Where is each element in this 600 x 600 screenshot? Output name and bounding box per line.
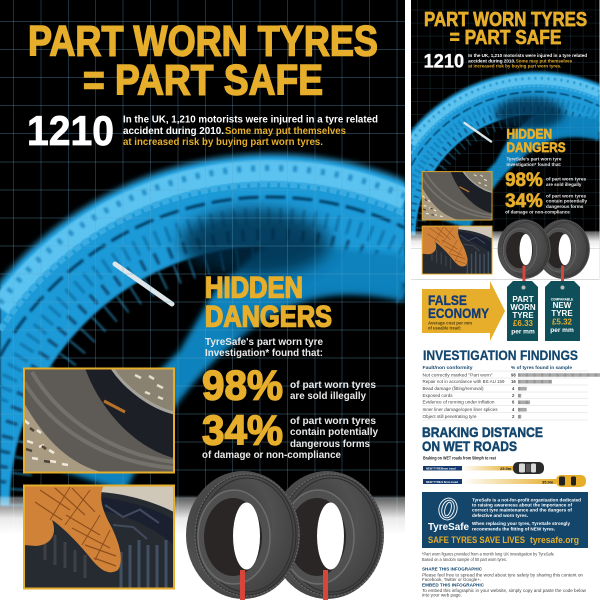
text: share and embed: SHARE THIS INFOGRAPHIC (422, 567, 483, 572)
overview header section: of damage or non-compliance (505, 209, 570, 214)
panel: TyreSafe information: correct tyre maintenance and the dangers of (472, 508, 573, 512)
heading: braking distance (422, 424, 543, 454)
overview header section: of part worn tyres (546, 177, 587, 182)
panel: TyreSafe information: recommends the fitting of NEW tyres. (472, 526, 555, 532)
title (28, 18, 378, 104)
overview header section: Investigation* found that: (506, 162, 562, 168)
overview header section: DANGERS (506, 140, 566, 155)
table: investigation findings: Repair not in accordance with BS AU 159 (422, 379, 505, 384)
statistic: 34% (202, 406, 378, 461)
overview header section: contain potentially (546, 199, 587, 204)
heading: hidden dangers: HIDDEN (205, 272, 303, 304)
artwork: tyre background, photos and tyres (0, 0, 405, 600)
price tag: new tyre: NEW (553, 301, 572, 310)
statistic: 34%: dangerous forms (290, 439, 370, 450)
table: investigation findings: Inner liner damage/open liner splices (422, 407, 498, 412)
table: investigation findings: Evidence of running under inflation (422, 400, 495, 404)
overview header section: 34% (505, 190, 543, 212)
panel: main infographic close-up (0, 0, 405, 600)
table: investigation findings: Bead damage (fitting/removal) (422, 386, 484, 391)
statistic: 98%: 98% (202, 362, 283, 408)
overview header section (411, 0, 600, 279)
panel: TyreSafe information: defective and worn tyres. (472, 513, 528, 518)
price tag: part worn tyre: TYRE (512, 311, 534, 320)
heading: hidden dangers: DANGERS (205, 300, 332, 334)
overview header section: HIDDEN (506, 127, 552, 142)
statistic: 1210 injured: accident during 2010. (123, 126, 224, 137)
overview header section: are sold illegally (546, 182, 582, 187)
text: footnote (422, 552, 555, 562)
false economy arrow: Average cost per mm (428, 320, 472, 326)
price tag: part worn tyre: per mm (511, 328, 535, 336)
table: investigation findings: 4 (512, 386, 515, 391)
table: investigation findings: 16 (511, 379, 516, 384)
price tag: part worn tyre: £6.33 (513, 319, 534, 328)
false economy arrow: ECONOMY (428, 305, 490, 321)
price tag: new tyre: per mm (550, 327, 574, 334)
title: = PART SAFE (83, 56, 323, 104)
panel: TyreSafe information: When replacing your tyres, TyreSafe strongly (472, 521, 570, 526)
panel: TyreSafe information: TyreSafe is a not-for-profit organisation dedicated (472, 498, 581, 502)
table: investigation findings: 6 (512, 400, 515, 404)
price tag: part worn tyre (507, 266, 538, 341)
text: share and embed: Facebook, Twitter or Google+. (422, 577, 481, 582)
icon: yellow car (556, 475, 586, 487)
chart: braking distance bars (423, 456, 586, 487)
statistic: 1210 injured: In the UK, 1,210 motorists were injured in a tyre related (123, 114, 378, 126)
table: investigation findings: Object still penetrating tyre (422, 414, 477, 419)
chart: braking distance bars: 35.9m (542, 480, 554, 484)
price tag: new tyre: TYRE (551, 309, 573, 318)
panel: TyreSafe information: TyreSafe (428, 522, 469, 533)
price tag: part worn tyre: PART (512, 295, 534, 304)
table: investigation findings: Fault/non conformity (422, 365, 473, 370)
chart: braking distance bars: Braking on WET roads from 50mph to rest (423, 456, 496, 460)
overview header section: In the UK, 1,210 motorists were injured in a tyre related (468, 53, 587, 58)
overview header section: at increased risk by buying part worn tyres. (468, 64, 561, 69)
text: share and embed: EMBED THIS INFOGRAPHIC (422, 582, 485, 588)
table: investigation findings: % of tyres found in sample (511, 365, 573, 370)
text: investigation intro: TyreSafe's part worn tyre (205, 336, 323, 348)
overview header section: 1210 (424, 51, 464, 73)
price tag: part worn tyre: WORN (510, 303, 536, 312)
overview header section: Some may put themselves (516, 58, 573, 63)
heading: braking distance: BRAKING DISTANCE (422, 424, 543, 440)
overview header section: of part worn tyres (546, 193, 587, 198)
text: share and embed: Please feel free to spread the word about tyre safety by sharing this content on (422, 572, 584, 578)
panel: TyreSafe information: tyresafe.org (530, 535, 579, 546)
statistic: 1210 injured: 1210 (27, 107, 114, 154)
chart: braking distance bars: NEW TYRE/1.6mm tread (426, 480, 458, 484)
false economy arrow (422, 281, 505, 341)
title: PART WORN TYRES (28, 18, 378, 66)
table: investigation findings: 4 (512, 407, 515, 412)
panel: TyreSafe information: SAFE TYRES SAVE LIVES (428, 535, 525, 546)
overview header section: accident during 2010. (468, 58, 515, 63)
panel: TyreSafe information (422, 492, 588, 548)
icon: TyreSafe logo tyre (436, 496, 460, 522)
chart: braking distance bars: NEW TYRE/8mm tread (426, 466, 456, 470)
statistic: 98% (202, 362, 376, 408)
text: share and embed (422, 567, 587, 598)
panel: TyreSafe information: to raising awareness about the importance of (472, 502, 573, 508)
heading: hidden dangers (205, 272, 332, 334)
statistic: 98%: of part worn tyres (290, 380, 376, 391)
statistic: 34%: contain potentially (290, 427, 378, 438)
statistic: 34%: of part worn tyres (290, 416, 376, 427)
statistic: 34%: 34% (202, 406, 283, 454)
chart: braking distance bars: 25.9m (500, 466, 512, 471)
table: investigation findings: 2 (512, 414, 515, 419)
table: investigation findings: 98 (511, 372, 516, 378)
table: investigation findings: Exposed cords (422, 393, 452, 398)
heading: investigation findings: INVESTIGATION FINDINGS (423, 347, 578, 363)
statistic: 1210 injured (27, 107, 378, 154)
text: share and embed: into your web page. (422, 592, 462, 598)
text: investigation intro: Investigation* found that: (205, 347, 323, 359)
text: footnote: *Part worn figures provided from a month long UK investigation by TyreSafe (422, 552, 555, 556)
heading: braking distance: ON WET ROADS (422, 438, 517, 454)
icon: dark car (513, 462, 544, 474)
price tag: new tyre (545, 266, 580, 341)
overview header section: dangerous forms (546, 204, 584, 209)
price tag: new tyre: COMPARABLE (551, 298, 573, 302)
overview header section: = PART SAFE (450, 27, 561, 49)
text: share and embed: To embed this infographic in your website, simply copy and paste the code below (422, 588, 587, 593)
false economy arrow: of useable tread: (428, 326, 461, 330)
overview header section: TyreSafe's part worn tyre (506, 157, 562, 163)
price tag: new tyre: £5.32 (552, 318, 573, 326)
text: footnote: Based on a random sample of 50 part worn tyres. (422, 557, 507, 562)
table: investigation findings: Not correctly marked "Part worn" (422, 372, 493, 378)
statistic: 1210 injured: at increased risk by buying part worn tyres. (123, 137, 323, 148)
statistic: 34%: of damage or non-compliance (202, 450, 341, 461)
table: investigation findings (422, 365, 600, 420)
false economy arrow: FALSE (428, 292, 467, 308)
table: investigation findings: 2 (512, 393, 515, 398)
statistic: 98%: are sold illegally (290, 391, 366, 402)
statistic: 1210 injured: Some may put themselves (225, 126, 346, 137)
panel: full infographic overview (411, 0, 600, 598)
text: investigation intro (205, 336, 323, 359)
overview header section: 98% (505, 169, 543, 191)
